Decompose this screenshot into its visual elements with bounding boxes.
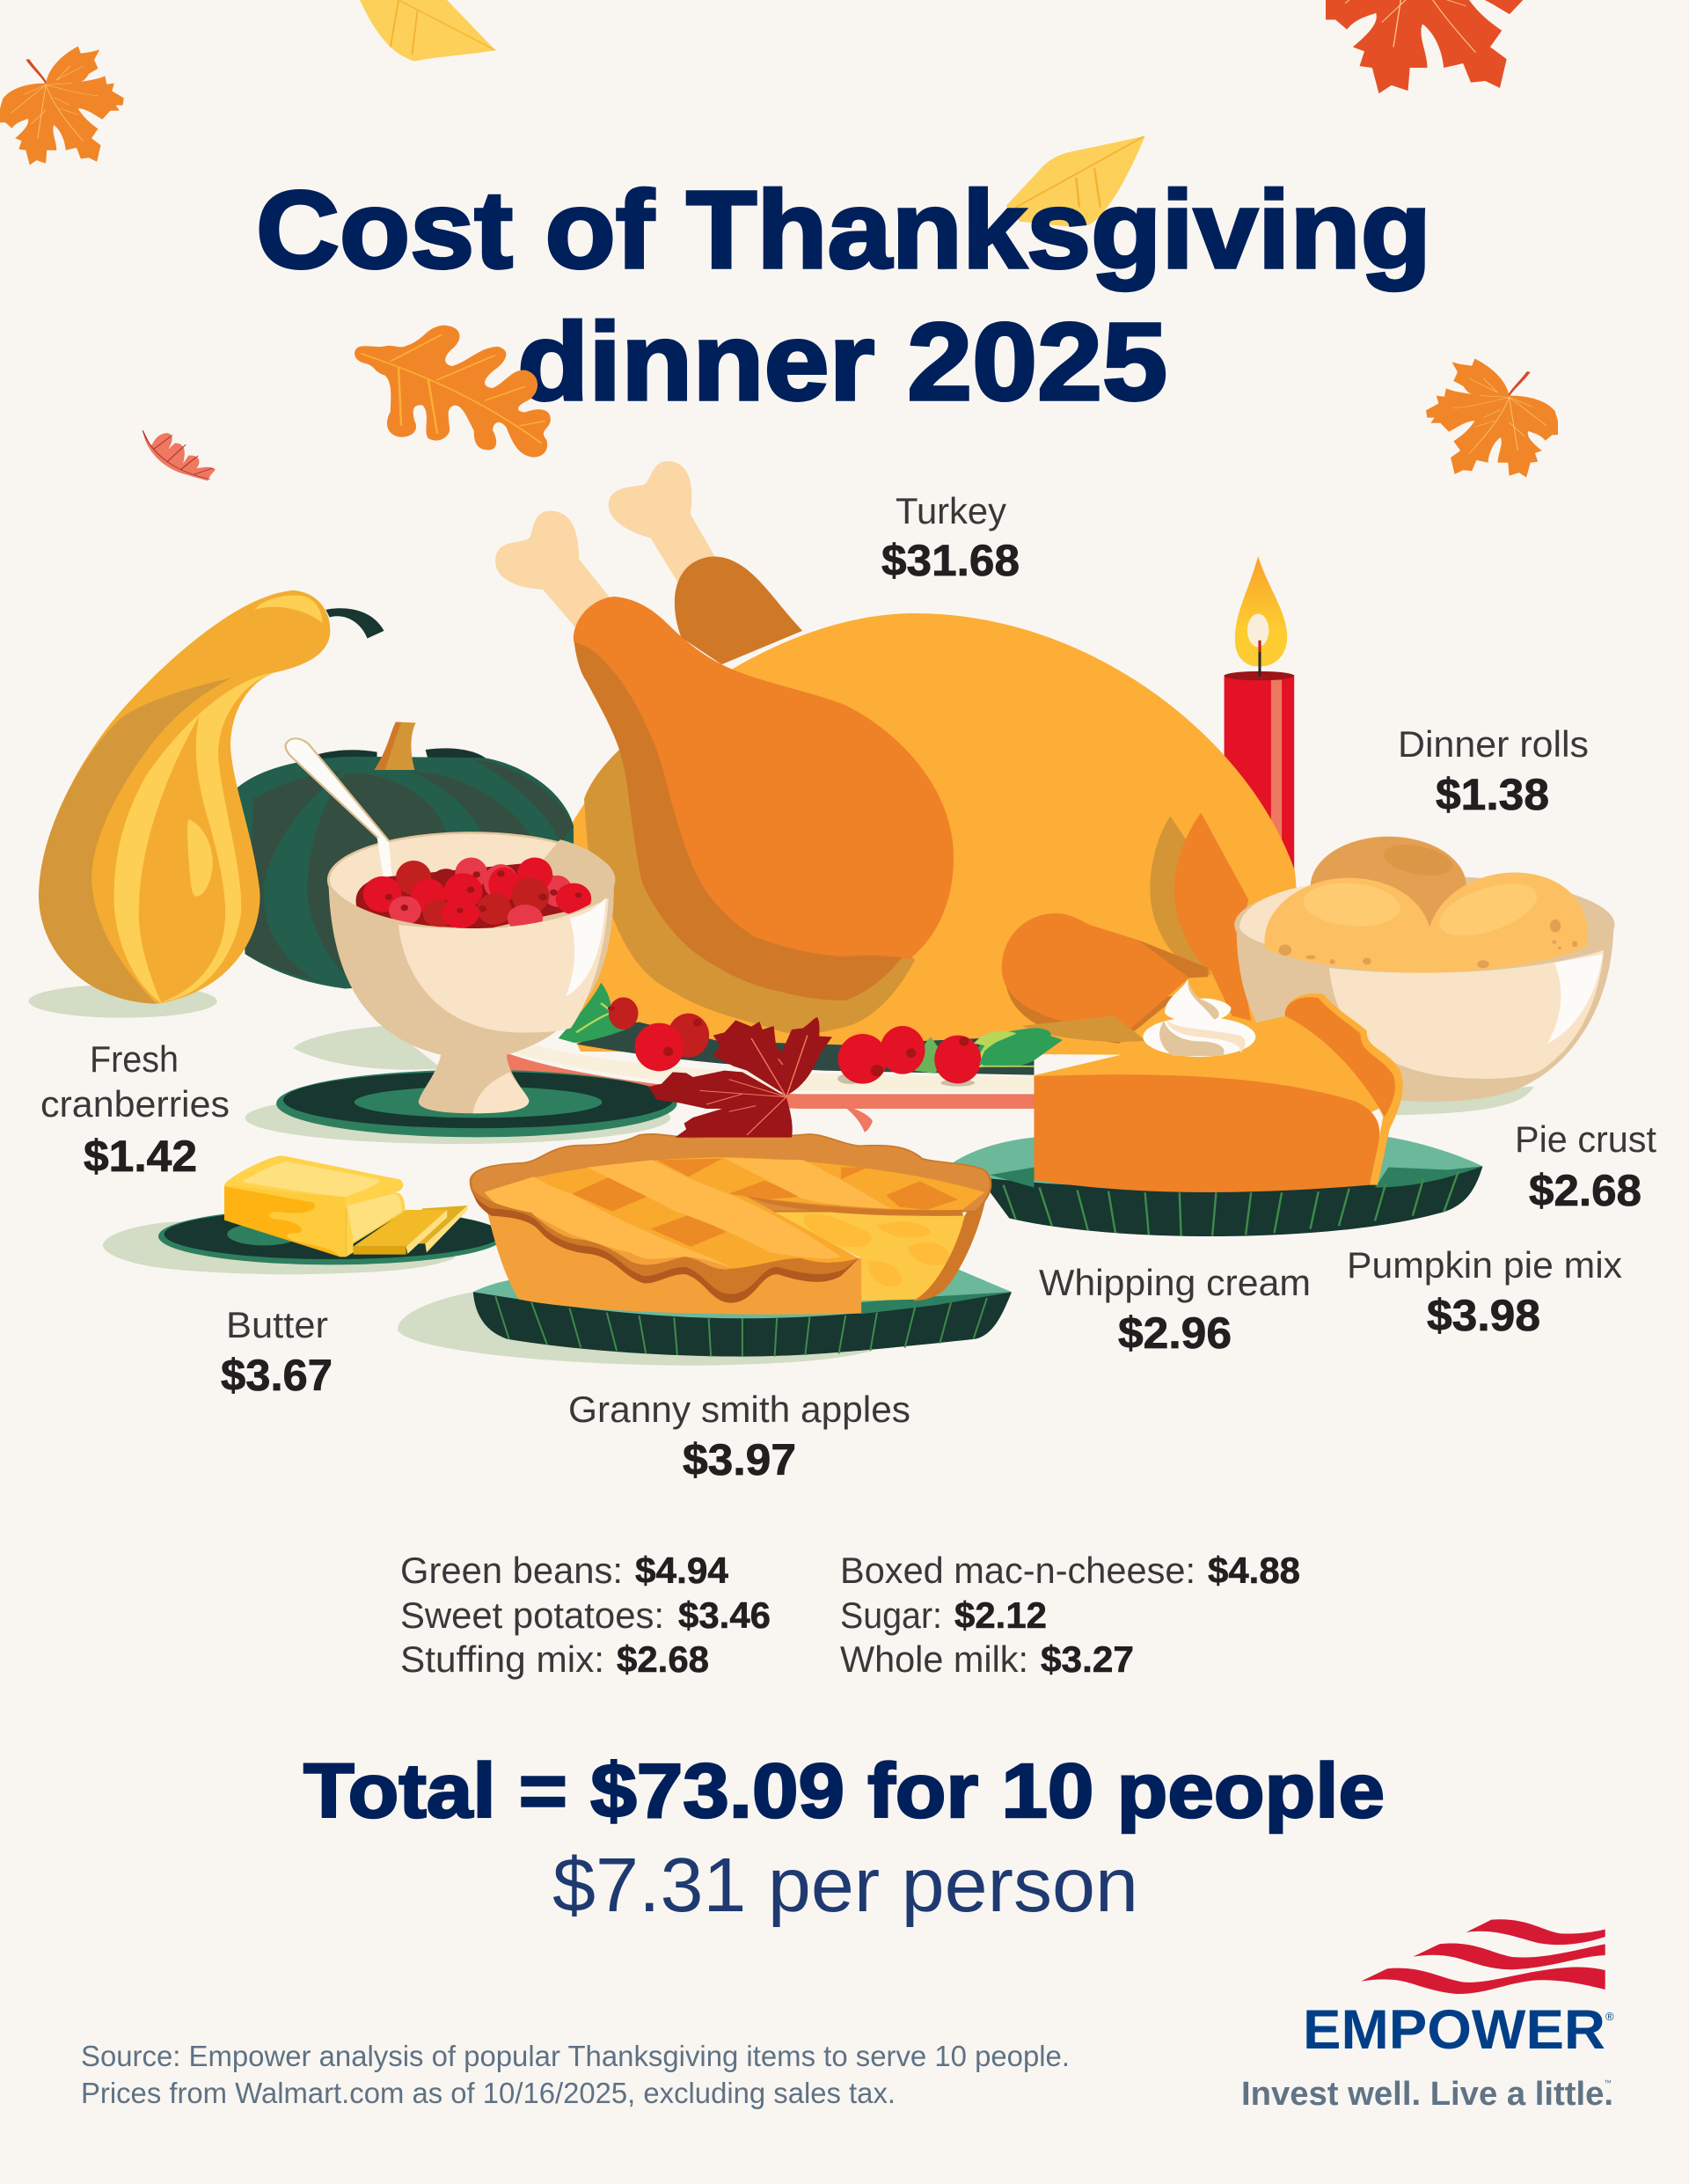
label: pumpkin pie mix: $3.98: [1427, 1291, 1540, 1340]
inner bowl: [328, 832, 614, 927]
plate: [473, 1292, 1012, 1357]
bowl front: [1237, 927, 1613, 1102]
illustration: pumpkin pie slice: [947, 993, 1482, 1236]
top surface: [485, 1157, 984, 1269]
plate: [947, 1166, 1482, 1236]
price list: right column: $4.88: [1208, 1550, 1300, 1591]
bowl body: [328, 883, 614, 1055]
illustration: dinner rolls bowl: [1234, 837, 1614, 1115]
per person text: $7.31 per person: [552, 1843, 1138, 1928]
label: butter: [221, 1304, 333, 1400]
price list: left column: [400, 1550, 771, 1680]
icon: candle: [1225, 556, 1294, 897]
price list: right column: $3.27: [1041, 1638, 1134, 1680]
spoon neck over rim: [377, 838, 392, 877]
price list: left column: Green beans:: [400, 1550, 623, 1591]
cut crust: [744, 1196, 963, 1216]
illustration: roast turkey: [495, 461, 1311, 1056]
foot: [419, 1051, 529, 1113]
plate: [276, 1070, 677, 1137]
illustration: gourd: [28, 590, 384, 1018]
label: dinner rolls: Dinner rolls: [1398, 723, 1589, 765]
filling: [747, 1203, 964, 1301]
price list: left column: $2.68: [617, 1638, 709, 1680]
label: dinner rolls: [1398, 723, 1589, 819]
icon: red-orange maple leaf top right: [1326, 0, 1548, 93]
lattice diamonds: [572, 1159, 958, 1247]
icon: dark red maple leaf: [648, 1017, 832, 1138]
illustration: right leaf garnish: [974, 1031, 1063, 1067]
turkey thigh shade inner: [574, 634, 906, 1000]
label: butter: $3.67: [221, 1351, 333, 1400]
plate shadow: [398, 1292, 873, 1366]
pie side: [486, 1208, 861, 1315]
price list: right column: Boxed mac-n-cheese:: [840, 1550, 1195, 1591]
total heading: Total = $73.09 for 10 people: [303, 1748, 1385, 1834]
butter slices: [411, 1206, 468, 1243]
illustration: whipped cream: [1143, 979, 1255, 1057]
label: turkey: Turkey: [896, 490, 1006, 531]
label: fresh cranberries: [40, 1038, 230, 1181]
illustration: butter on plate: [103, 1155, 504, 1274]
source note: [81, 2040, 1070, 2109]
icon: oak leaf: [355, 326, 551, 458]
top surface: [1034, 1015, 1383, 1117]
crust: [1285, 993, 1403, 1185]
label: whipping cream: $2.96: [1118, 1308, 1232, 1358]
price list: right column: Whole milk:: [840, 1638, 1028, 1680]
price list: left column: Stuffing mix:: [400, 1638, 604, 1680]
turkey body: [552, 613, 1311, 1056]
price list: left column: $3.46: [678, 1594, 771, 1636]
icon: yellow leaf behind title: [1006, 136, 1145, 226]
label: dinner rolls: $1.38: [1436, 770, 1549, 819]
shadows: [294, 1026, 442, 1070]
label: pie crust: $2.68: [1529, 1166, 1641, 1215]
illustration: lattice apple pie: [398, 1133, 1012, 1366]
price list: right column: [840, 1550, 1300, 1680]
turkey thigh shade outer: [584, 748, 915, 1034]
illustration: cranberry bowl on plate: [245, 738, 677, 1144]
lattice strips: [485, 1176, 734, 1269]
label: turkey: $31.68: [881, 536, 1020, 585]
icon: small coral leaf: [143, 430, 216, 480]
label: whipping cream: Whipping cream: [1039, 1262, 1311, 1303]
logo tagline: Invest well. Live a little.: [1241, 2076, 1613, 2113]
side: [1034, 1074, 1379, 1192]
butter right face: [346, 1192, 406, 1257]
label: whipping cream: [1039, 1262, 1311, 1358]
label: granny smith apples: $3.97: [683, 1435, 796, 1484]
left roll: [1264, 878, 1431, 975]
price list: left column: $4.94: [635, 1550, 729, 1591]
price list: right column: Sugar:: [840, 1594, 942, 1636]
icon: orange maple leaf right: [1426, 358, 1558, 477]
source note: Prices from Walmart.com as of 10/16/2025, excluding sales tax.: [81, 2077, 896, 2109]
butter top: [224, 1155, 403, 1197]
label: fresh cranberries: Fresh: [90, 1038, 179, 1080]
logo: Empower: ™: [1604, 2078, 1612, 2087]
price list: right column: $2.12: [954, 1594, 1047, 1636]
outer right wall: [913, 1179, 989, 1301]
label: granny smith apples: Granny smith apples: [568, 1389, 910, 1430]
logo: Empower: [1241, 1919, 1614, 2113]
rim: [471, 1133, 991, 1212]
label: butter: Butter: [226, 1304, 328, 1345]
right roll: [1428, 872, 1588, 975]
label: pumpkin pie mix: Pumpkin pie mix: [1347, 1244, 1622, 1286]
label: pumpkin pie mix: [1347, 1244, 1622, 1340]
source note: Source: Empower analysis of popular Thanksgiving items to serve 10 people.: [81, 2040, 1070, 2072]
butter front: [224, 1185, 346, 1257]
front crust: [474, 1191, 859, 1303]
turkey bones and back leg: [495, 461, 802, 664]
logo flag stripes: [1361, 1919, 1605, 1994]
title: [256, 169, 1431, 423]
icon: orange maple leaf top left: [0, 46, 124, 165]
logo wordmark: EMPOWER: [1303, 1999, 1605, 2061]
cranberries: [356, 862, 587, 929]
turkey thigh main: [574, 597, 954, 959]
spoon: [285, 738, 439, 880]
label: fresh cranberries: cranberries: [40, 1083, 230, 1125]
illustration: turkey platter with berries: [507, 983, 1051, 1132]
label: fresh cranberries: $1.42: [84, 1132, 197, 1181]
icon: yellow leaf top: [360, 0, 495, 62]
price list: left column: Sweet potatoes:: [400, 1594, 664, 1636]
label: pie crust: [1515, 1118, 1656, 1215]
icon: green pumpkin: [237, 722, 574, 988]
label: pie crust: Pie crust: [1515, 1118, 1656, 1160]
logo: Empower: ®: [1605, 2010, 1614, 2023]
label: turkey: [881, 490, 1020, 585]
label: granny smith apples: [568, 1389, 910, 1484]
title: Cost of Thanksgiving: [256, 169, 1431, 291]
turkey front drumstick and wing: [1002, 813, 1251, 1044]
back roll: [1311, 837, 1466, 937]
title: dinner 2025: [517, 301, 1167, 423]
